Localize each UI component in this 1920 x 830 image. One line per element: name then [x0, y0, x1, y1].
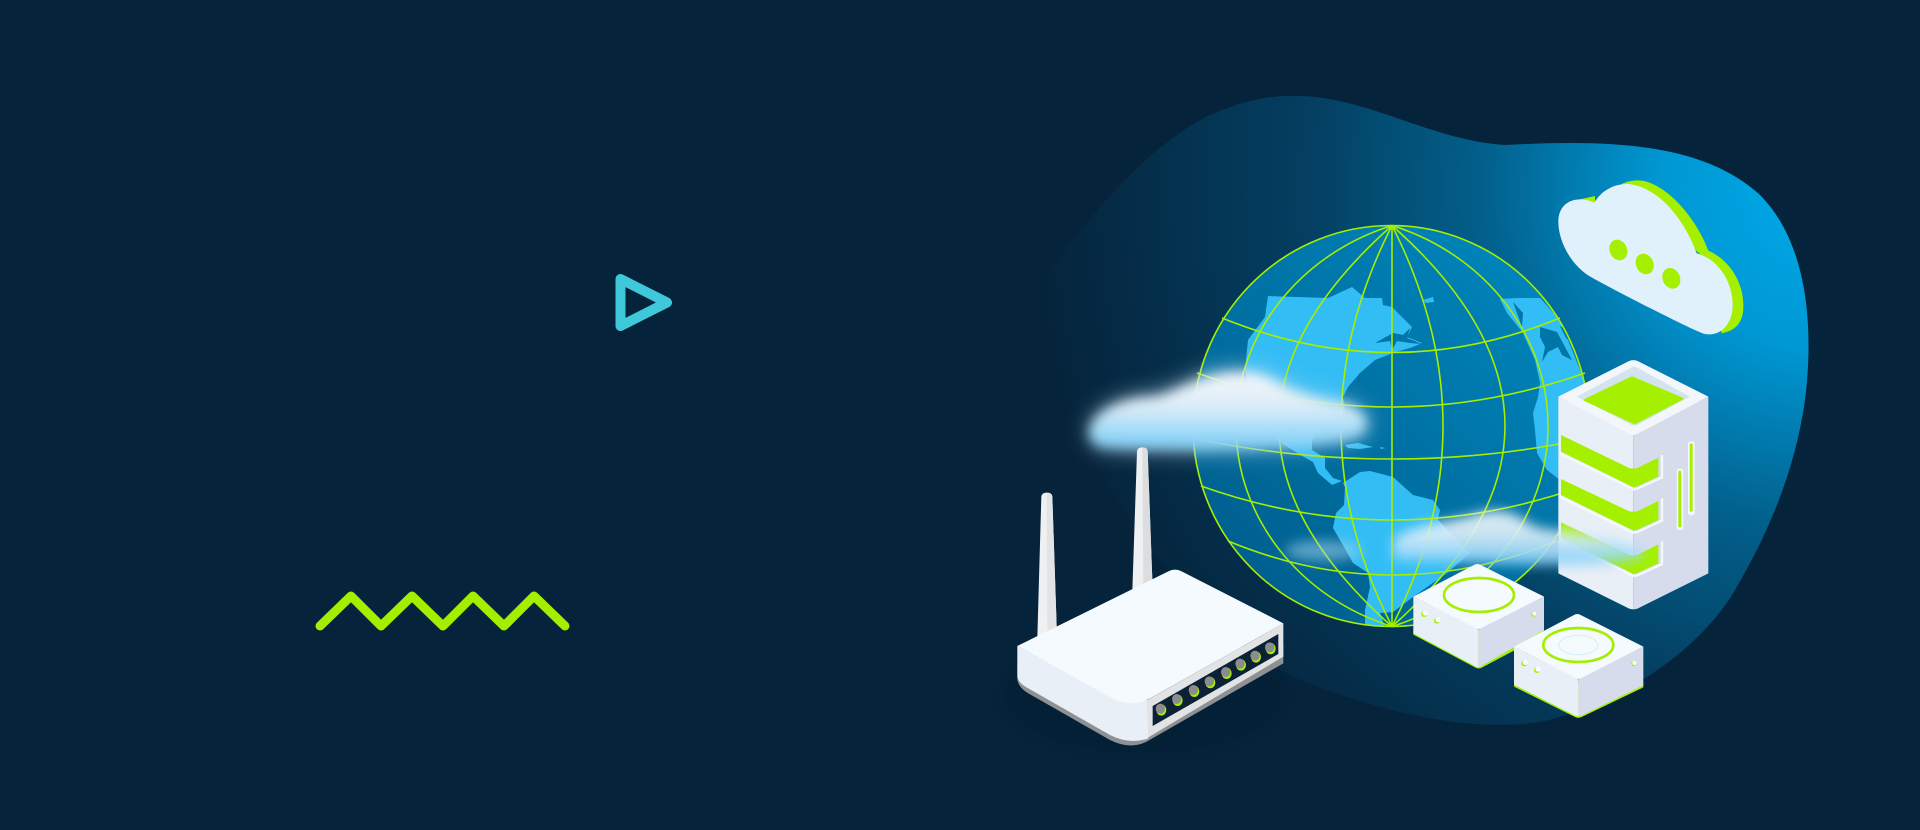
- cloud body: [1090, 373, 1366, 448]
- blue background blob: [1024, 96, 1809, 725]
- continents: [1245, 287, 1600, 627]
- server top green panel: [1585, 377, 1683, 423]
- zigzag decoration: [320, 596, 565, 626]
- server left face: [1558, 397, 1633, 609]
- globe: [1192, 225, 1600, 627]
- cloud glow: [1090, 369, 1368, 450]
- left fog cloud: [1090, 369, 1368, 450]
- router right face: [1147, 623, 1283, 737]
- port dots: [1421, 610, 1536, 624]
- server band borders: [1559, 453, 1662, 576]
- top face: [1413, 564, 1544, 629]
- mesh box front: [1514, 614, 1643, 718]
- ring: [1444, 578, 1514, 612]
- green base edge: [1413, 630, 1544, 668]
- south america: [1333, 471, 1470, 627]
- cloud body: [1393, 511, 1644, 565]
- right antenna: [1132, 447, 1152, 591]
- right face: [1578, 647, 1643, 716]
- illustration canvas: [316, 96, 1809, 746]
- router shadow: [1003, 640, 1283, 753]
- server right face: [1633, 397, 1708, 609]
- europe and africa: [1500, 298, 1584, 479]
- globe disc: [1192, 226, 1590, 626]
- speech cloud icon: [1558, 180, 1743, 334]
- right fog cloud: [1285, 511, 1644, 565]
- port panel: [1153, 634, 1278, 726]
- triangle decoration: [620, 279, 667, 326]
- server top inset: [1577, 367, 1690, 425]
- router left face: [1017, 646, 1148, 741]
- globe grid: [1192, 225, 1590, 627]
- router top face: [1017, 570, 1283, 703]
- wifi router: [1003, 447, 1283, 753]
- cloud green back: [1580, 180, 1743, 333]
- ring: [1543, 628, 1613, 662]
- port dots: [1521, 660, 1636, 673]
- grey base rim: [1017, 643, 1283, 745]
- inlets and seas: [1375, 302, 1575, 362]
- left antenna: [1037, 493, 1057, 637]
- north america: [1245, 287, 1422, 485]
- green base edge: [1514, 683, 1643, 718]
- server top face: [1558, 360, 1708, 435]
- mesh box back: [1413, 564, 1544, 668]
- left face: [1514, 647, 1578, 716]
- left face: [1413, 597, 1478, 667]
- inner dashed ring: [1559, 635, 1598, 655]
- cloud dots: [1606, 237, 1684, 292]
- leds: [1156, 642, 1276, 716]
- top face: [1514, 614, 1643, 679]
- right face: [1478, 597, 1544, 667]
- server vents: [1677, 441, 1695, 530]
- islands: [1345, 297, 1434, 449]
- server green bands: [1561, 435, 1658, 574]
- cloud face: [1558, 184, 1733, 334]
- server tower: [1558, 360, 1708, 609]
- faint haze: [1285, 541, 1362, 561]
